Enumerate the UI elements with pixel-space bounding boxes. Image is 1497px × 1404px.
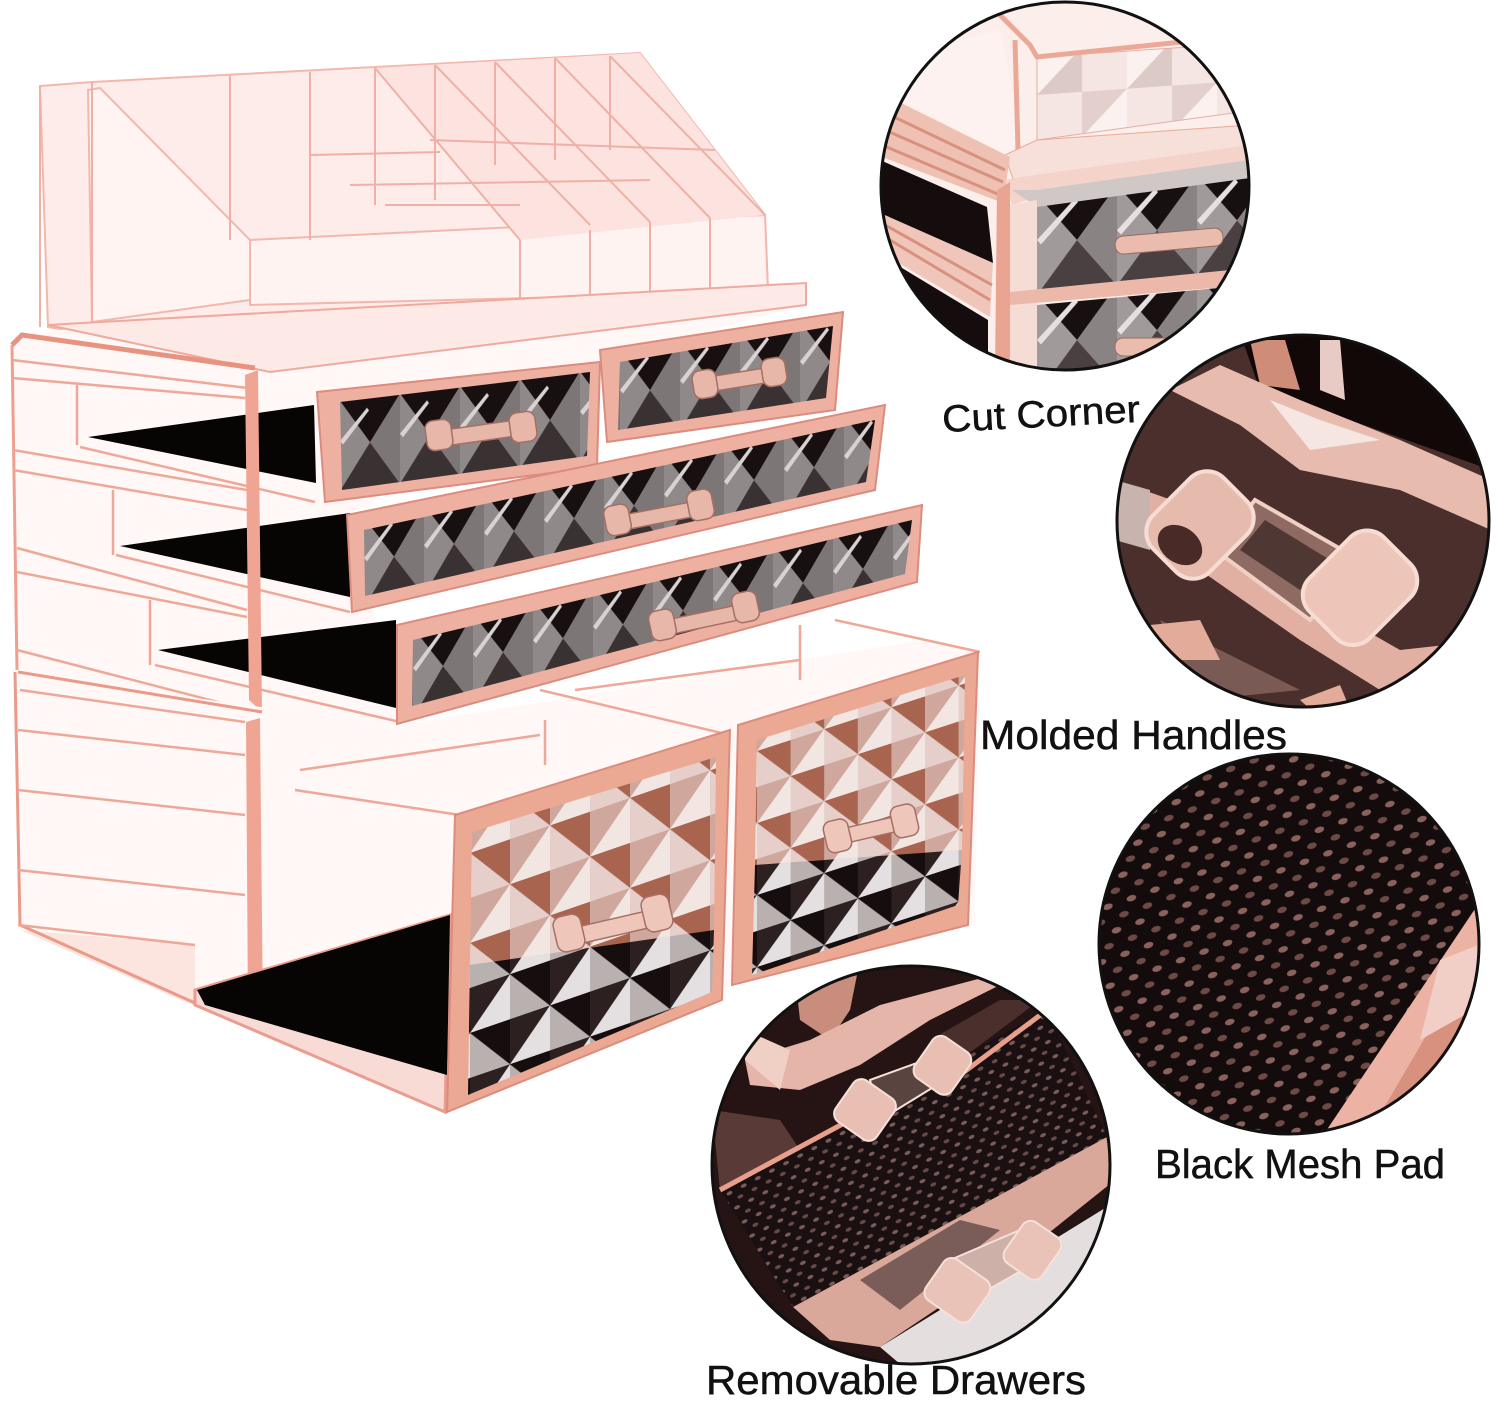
handle [691, 356, 788, 400]
handle [602, 488, 716, 537]
drawer: large right [732, 652, 978, 985]
label: removable drawers: Removable Drawers [706, 1357, 1086, 1403]
label: molded handles: Molded Handles [980, 712, 1287, 758]
handle [822, 802, 920, 854]
middle case body [12, 283, 806, 725]
top lipstick tray [40, 53, 768, 362]
lower case body [15, 620, 980, 1052]
callout circle: removable drawers [712, 960, 1115, 1364]
handle [424, 410, 538, 452]
lower handle [921, 1217, 1065, 1327]
callout circle: molded handles [1115, 333, 1491, 709]
drawer: long third [347, 405, 885, 612]
drawer: upper left [317, 362, 600, 502]
mesh pads, middle case [88, 405, 396, 708]
corner post, middle case [245, 370, 262, 712]
drawer: large left [447, 730, 730, 1112]
drawer: upper right [600, 312, 843, 442]
callout circle: cut corner [880, 0, 1252, 372]
handle [551, 892, 675, 954]
drawer: long fourth [397, 505, 922, 724]
drawer tray, large [195, 915, 450, 1112]
handle [1144, 469, 1420, 647]
mesh pad, large drawer [197, 915, 450, 1075]
label: cut corner: Cut Corner [941, 389, 1141, 441]
product: acrylic organizer [12, 53, 980, 1112]
callout circle: black mesh pad [1098, 753, 1491, 1140]
upper handle [830, 1032, 975, 1145]
handle [647, 590, 761, 642]
label: black mesh pad: Black Mesh Pad [1155, 1141, 1445, 1187]
